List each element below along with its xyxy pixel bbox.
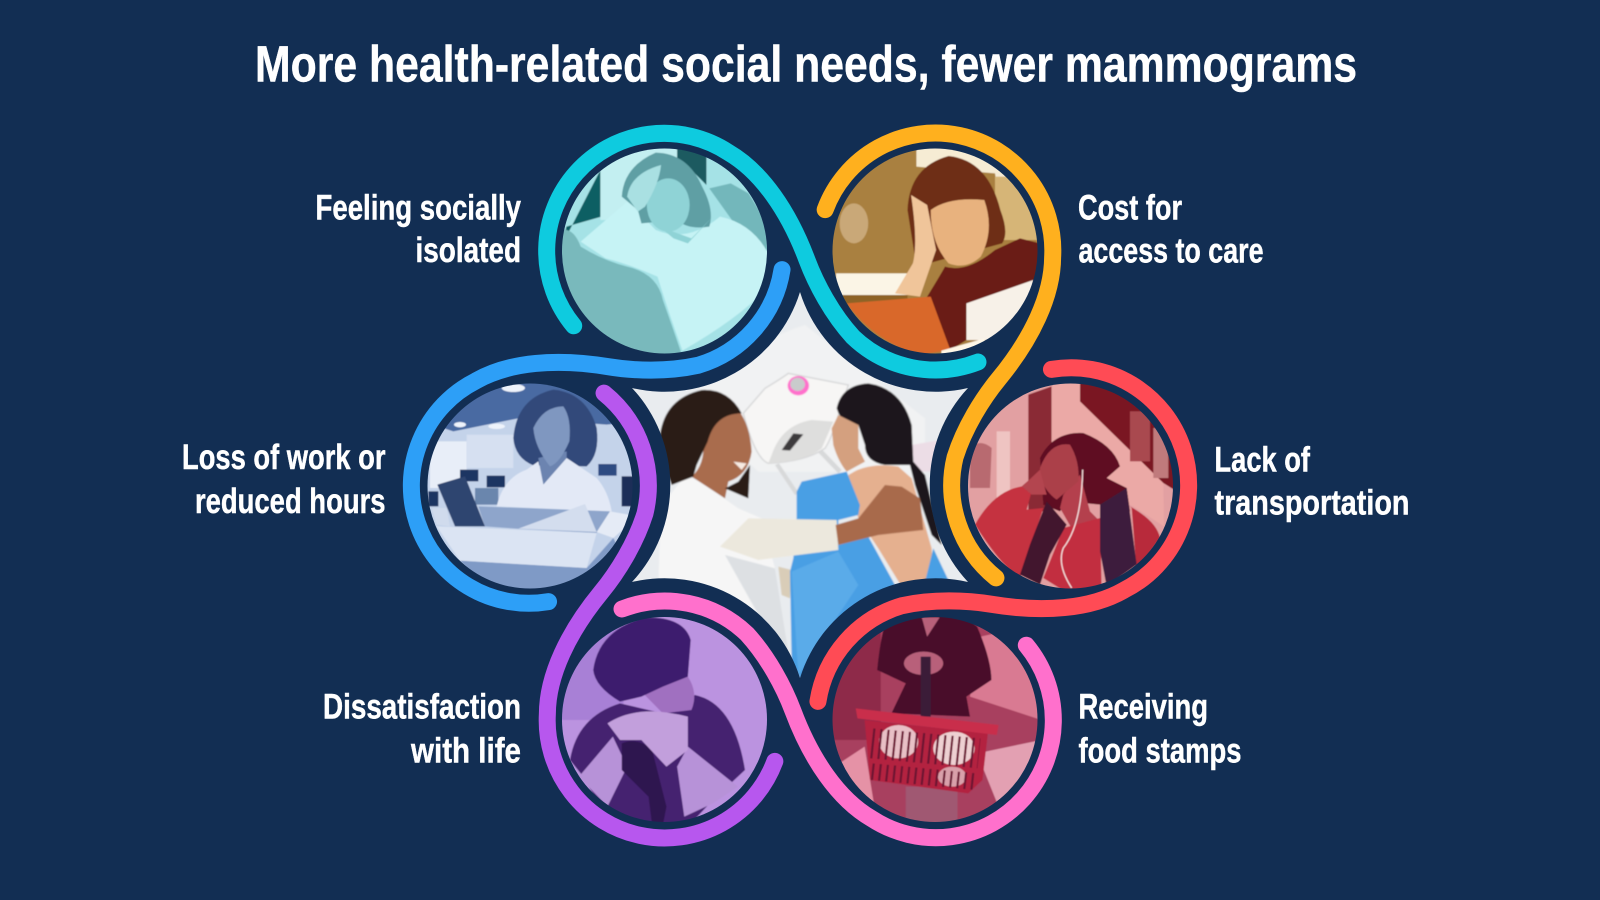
label: feeling socially isolated: isolated (416, 231, 521, 270)
label: feeling socially isolated: Feeling socially (316, 188, 521, 228)
ribbon: pink (622, 601, 1053, 838)
label: cost for access to care (1078, 188, 1264, 270)
photo: shopper with basket, crimson duotone (831, 613, 1041, 827)
label: loss of work or reduced hours (182, 438, 386, 521)
label: lack of transportation (1214, 440, 1410, 522)
label: dissatisfaction with life (323, 688, 521, 770)
photo: central mammogram scene (625, 285, 975, 685)
label: dissatisfaction with life: with life (410, 732, 521, 770)
label: receiving food stamps: food stamps (1078, 732, 1242, 770)
ribbon: teal (547, 133, 978, 370)
label: dissatisfaction with life: Dissatisfaction (323, 688, 521, 726)
label: feeling socially isolated (316, 188, 521, 270)
label: cost for access to care: Cost for (1078, 188, 1182, 228)
title: More health-related social needs, fewer mammograms (255, 36, 1357, 92)
label: loss of work or reduced hours: Loss of work or (182, 438, 386, 477)
label: lack of transportation: Lack of (1214, 440, 1310, 480)
ribbon: amber (773, 90, 1194, 582)
label: cost for access to care: access to care (1078, 232, 1264, 270)
ribbon: blue (368, 155, 789, 647)
ribbon: purple (406, 389, 827, 881)
label: lack of transportation: transportation (1214, 484, 1410, 522)
photo: woman at window with earphones, red duotone (963, 378, 1177, 595)
photo: woman with papers, amber duotone (831, 143, 1041, 360)
label: loss of work or reduced hours: reduced hours (195, 482, 386, 521)
ribbon: red (811, 324, 1232, 816)
label: receiving food stamps: Receiving (1078, 688, 1208, 726)
photo: elderly woman resting on cane, purple duotone (556, 613, 774, 827)
photo: woman on sofa, teal duotone (562, 148, 767, 354)
label: receiving food stamps (1078, 688, 1242, 770)
photo: woman carrying box, blue duotone (423, 378, 637, 595)
